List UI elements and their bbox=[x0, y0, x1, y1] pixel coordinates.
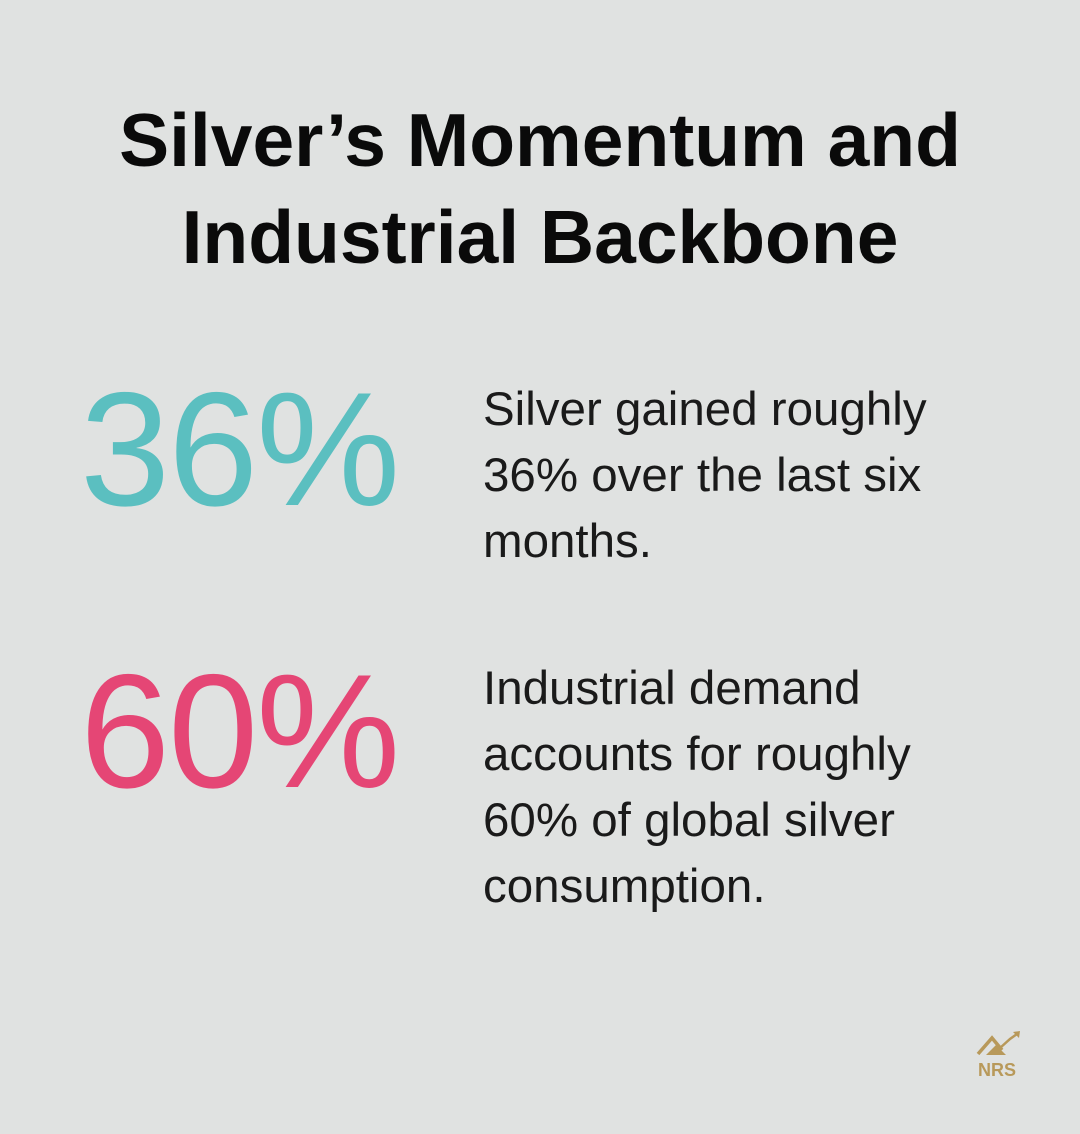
text: 36% description: 36% over the last six bbox=[483, 449, 921, 502]
text: 36% description bbox=[483, 383, 927, 568]
text: 60% description bbox=[483, 662, 911, 913]
logo: NRS bbox=[976, 1031, 1020, 1080]
title: Industrial Backbone bbox=[182, 195, 898, 279]
logo: NRS: NRS bbox=[978, 1060, 1016, 1080]
stat: 36%: 36% bbox=[80, 359, 398, 540]
text: 36% description: Silver gained roughly bbox=[483, 383, 927, 436]
text: 36% description: months. bbox=[483, 515, 652, 568]
text: 60% description: accounts for roughly bbox=[483, 728, 911, 781]
text: 60% description: Industrial demand bbox=[483, 662, 861, 715]
text: 60% description: consumption. bbox=[483, 860, 766, 913]
stat: 60%: 60% bbox=[80, 641, 398, 822]
title bbox=[119, 98, 961, 279]
text: 60% description: 60% of global silver bbox=[483, 794, 895, 847]
title: Silver’s Momentum and bbox=[119, 98, 961, 182]
